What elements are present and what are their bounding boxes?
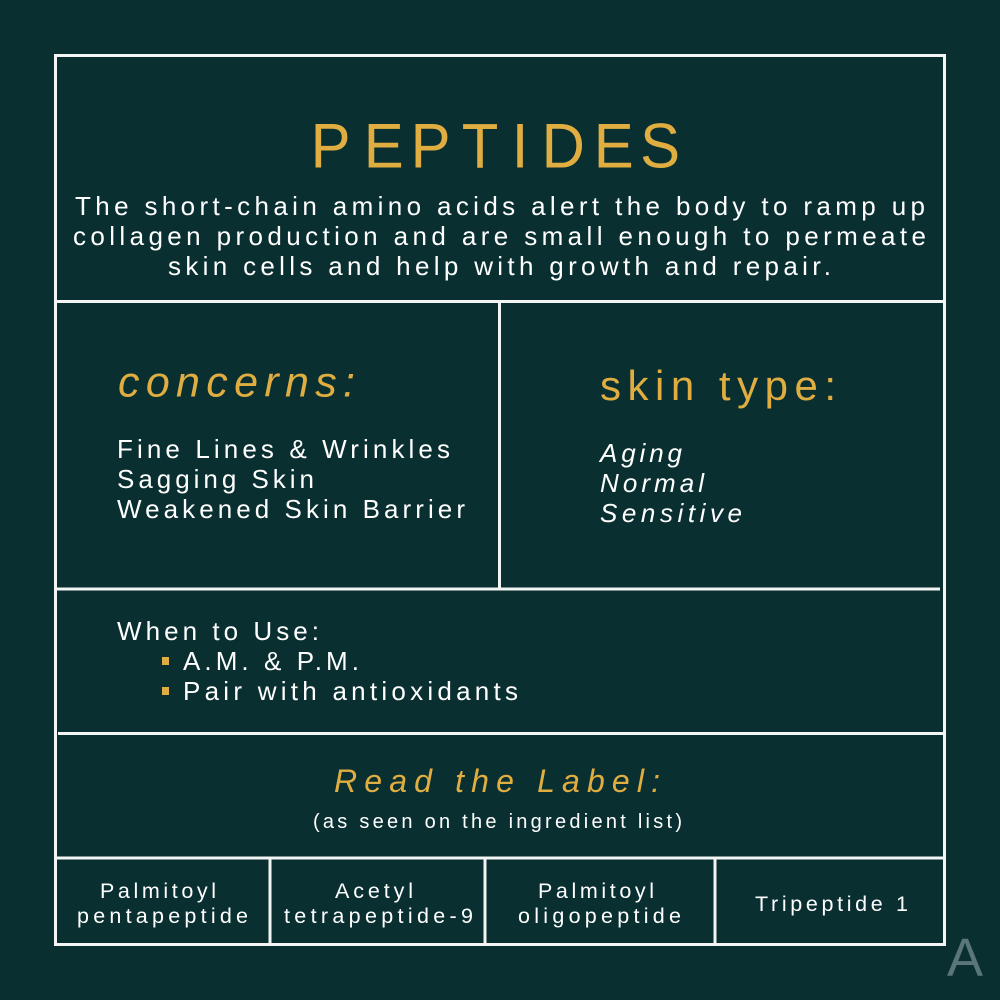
title: PEPTIDES	[311, 111, 680, 182]
skin type list	[598, 438, 742, 528]
read the label heading: Read the Label:	[334, 763, 660, 799]
bullet: antioxidants: Pair with antioxidants	[183, 676, 518, 706]
bullet: am pm: A.M. & P.M.	[183, 646, 359, 676]
intro text	[73, 191, 926, 281]
ingredient: tripeptide 1: Tripeptide 1	[755, 892, 908, 916]
ingredient: acetyl tetrapeptide-9: Acetyl	[335, 879, 413, 903]
concerns heading: concerns:	[118, 358, 355, 406]
intro text: The short-chain amino acids alert the body to ramp up	[75, 191, 925, 221]
skin type list: Normal	[600, 468, 705, 498]
ingredient: palmitoyl pentapeptide	[77, 879, 248, 928]
intro text: skin cells and help with growth and repair.	[168, 251, 831, 281]
panel: read the label	[313, 763, 682, 833]
ingredient: acetyl tetrapeptide-9: tetrapeptide-9	[284, 904, 473, 928]
ingredient: palmitoyl oligopeptide	[518, 879, 681, 928]
intro text: collagen production and are small enough to permeate	[73, 221, 926, 251]
concerns list	[117, 434, 465, 524]
ingredient: palmitoyl pentapeptide: pentapeptide	[77, 904, 248, 928]
panel: concerns	[117, 358, 465, 524]
when to use heading: When to Use:	[117, 616, 319, 646]
ingredient: acetyl tetrapeptide-9	[284, 879, 473, 928]
watermark: A	[947, 928, 983, 988]
concerns list: Weakened Skin Barrier	[117, 494, 465, 524]
ingredient: palmitoyl oligopeptide: oligopeptide	[518, 904, 681, 928]
skin type list: Sensitive	[600, 498, 742, 528]
concerns list: Sagging Skin	[117, 464, 314, 494]
ingredient: palmitoyl oligopeptide: Palmitoyl	[538, 879, 654, 903]
grid frame	[55, 56, 945, 945]
panel: when to use	[117, 616, 518, 706]
panel: skin type	[598, 362, 836, 528]
concerns list: Fine Lines & Wrinkles	[117, 434, 450, 464]
skin type list: Aging	[598, 438, 683, 468]
read the label note: (as seen on the ingredient list)	[313, 811, 682, 833]
ingredient: palmitoyl pentapeptide: Palmitoyl	[100, 879, 216, 903]
skin type heading: skin type:	[600, 362, 836, 409]
